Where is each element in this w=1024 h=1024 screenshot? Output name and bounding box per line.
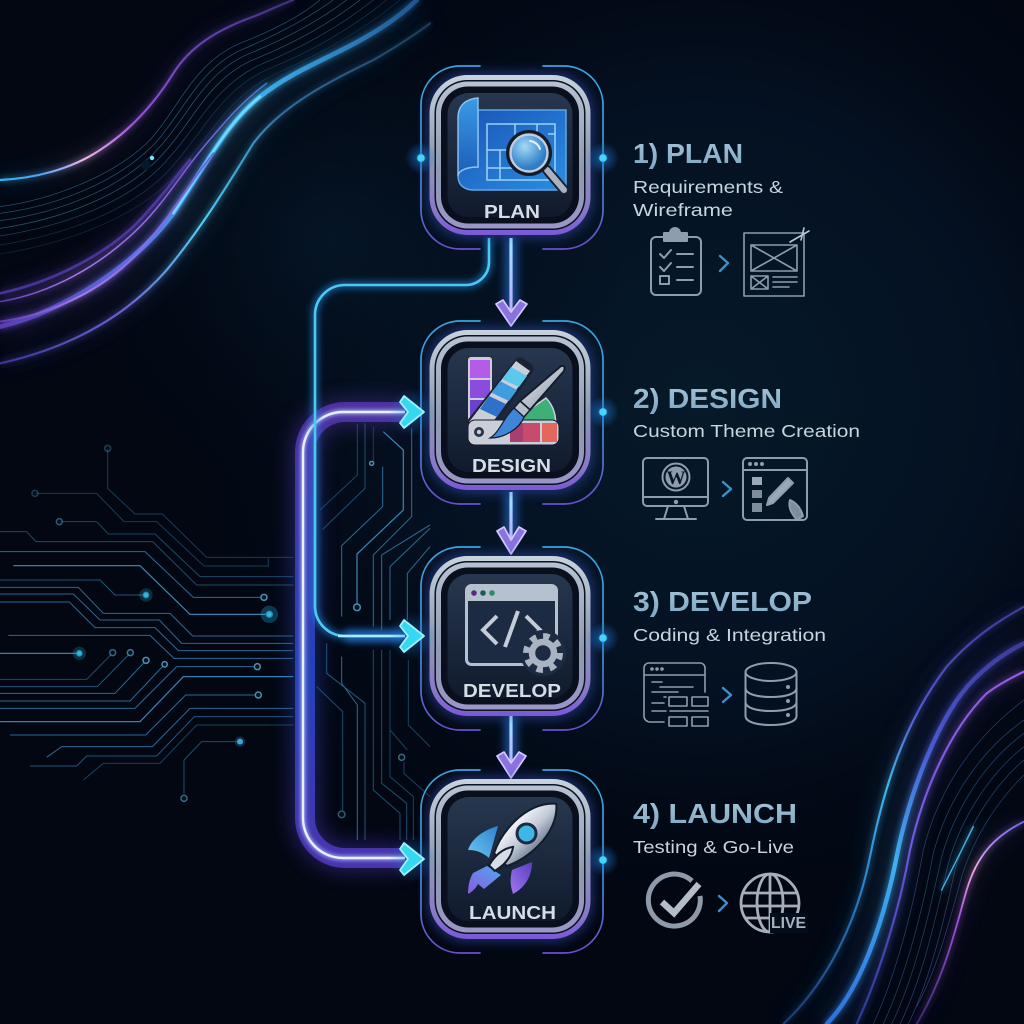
text block: step 3: Coding & Integration — [633, 625, 826, 645]
panel: design card — [421, 321, 619, 504]
text block: step 4 — [633, 798, 797, 857]
icon: wireframe sketch — [744, 228, 809, 296]
icon: globe with LIVE label: LIVE — [771, 915, 806, 932]
icon: WordPress monitor: W — [666, 468, 686, 489]
icon: check circle — [648, 874, 700, 926]
card label: DESIGN: DESIGN — [472, 456, 551, 476]
icon: globe with LIVE label — [741, 874, 808, 933]
icon: theme editor window — [743, 458, 807, 520]
arrow: loop line into Design and Launch — [303, 412, 405, 858]
text block: step 1: Wireframe — [633, 200, 733, 220]
decorative wave: top left — [0, 0, 430, 363]
arrow: launch chevron — [719, 896, 727, 911]
icon: code window with gear — [466, 585, 566, 676]
text block: step 2: 2) DESIGN — [633, 383, 782, 414]
text block: step 3: 3) DEVELOP — [633, 586, 812, 617]
arrow: Plan to Design — [496, 238, 527, 326]
panel: launch card — [421, 770, 619, 953]
decorative circuit traces — [0, 423, 430, 840]
arrow: Develop to Launch — [497, 716, 526, 778]
arrow: cyan head into Design — [388, 388, 436, 436]
arrow: develop chevron — [723, 688, 731, 702]
panel: develop card — [421, 547, 619, 730]
text block: step 4: Testing & Go-Live — [633, 837, 794, 857]
arrow: design chevron — [723, 482, 731, 496]
decorative wave: bottom right — [783, 607, 1024, 1024]
icon: blueprint with magnifier — [458, 98, 566, 190]
icon: rocket — [468, 792, 568, 894]
card label: DEVELOP: DEVELOP — [463, 681, 561, 701]
text block: step 3 — [633, 586, 826, 645]
card label: PLAN: PLAN — [484, 202, 540, 222]
text block: step 4: 4) LAUNCH — [633, 798, 797, 829]
icon: clipboard checklist — [651, 228, 701, 295]
text block: step 2: Custom Theme Creation — [633, 421, 860, 441]
text block: step 1: Requirements & — [633, 177, 783, 197]
arrow: Design to Develop — [497, 492, 526, 554]
icon: code and components — [644, 663, 708, 726]
icon: colour swatches and paint brush — [468, 357, 565, 445]
icon: database — [746, 663, 796, 725]
text block: step 1: 1) PLAN — [633, 138, 743, 169]
panel: plan card — [405, 66, 619, 249]
arrow: feedback line from Plan to Develop — [315, 238, 489, 636]
text block: step 2 — [633, 383, 860, 441]
arrow: plan chevron — [720, 256, 728, 271]
arrow: cyan head into Launch — [388, 835, 436, 883]
arrow: cyan head into Develop — [388, 612, 436, 660]
card label: LAUNCH: LAUNCH — [469, 903, 556, 923]
text block: step 1 — [633, 138, 783, 220]
icon: WordPress monitor — [643, 458, 708, 519]
